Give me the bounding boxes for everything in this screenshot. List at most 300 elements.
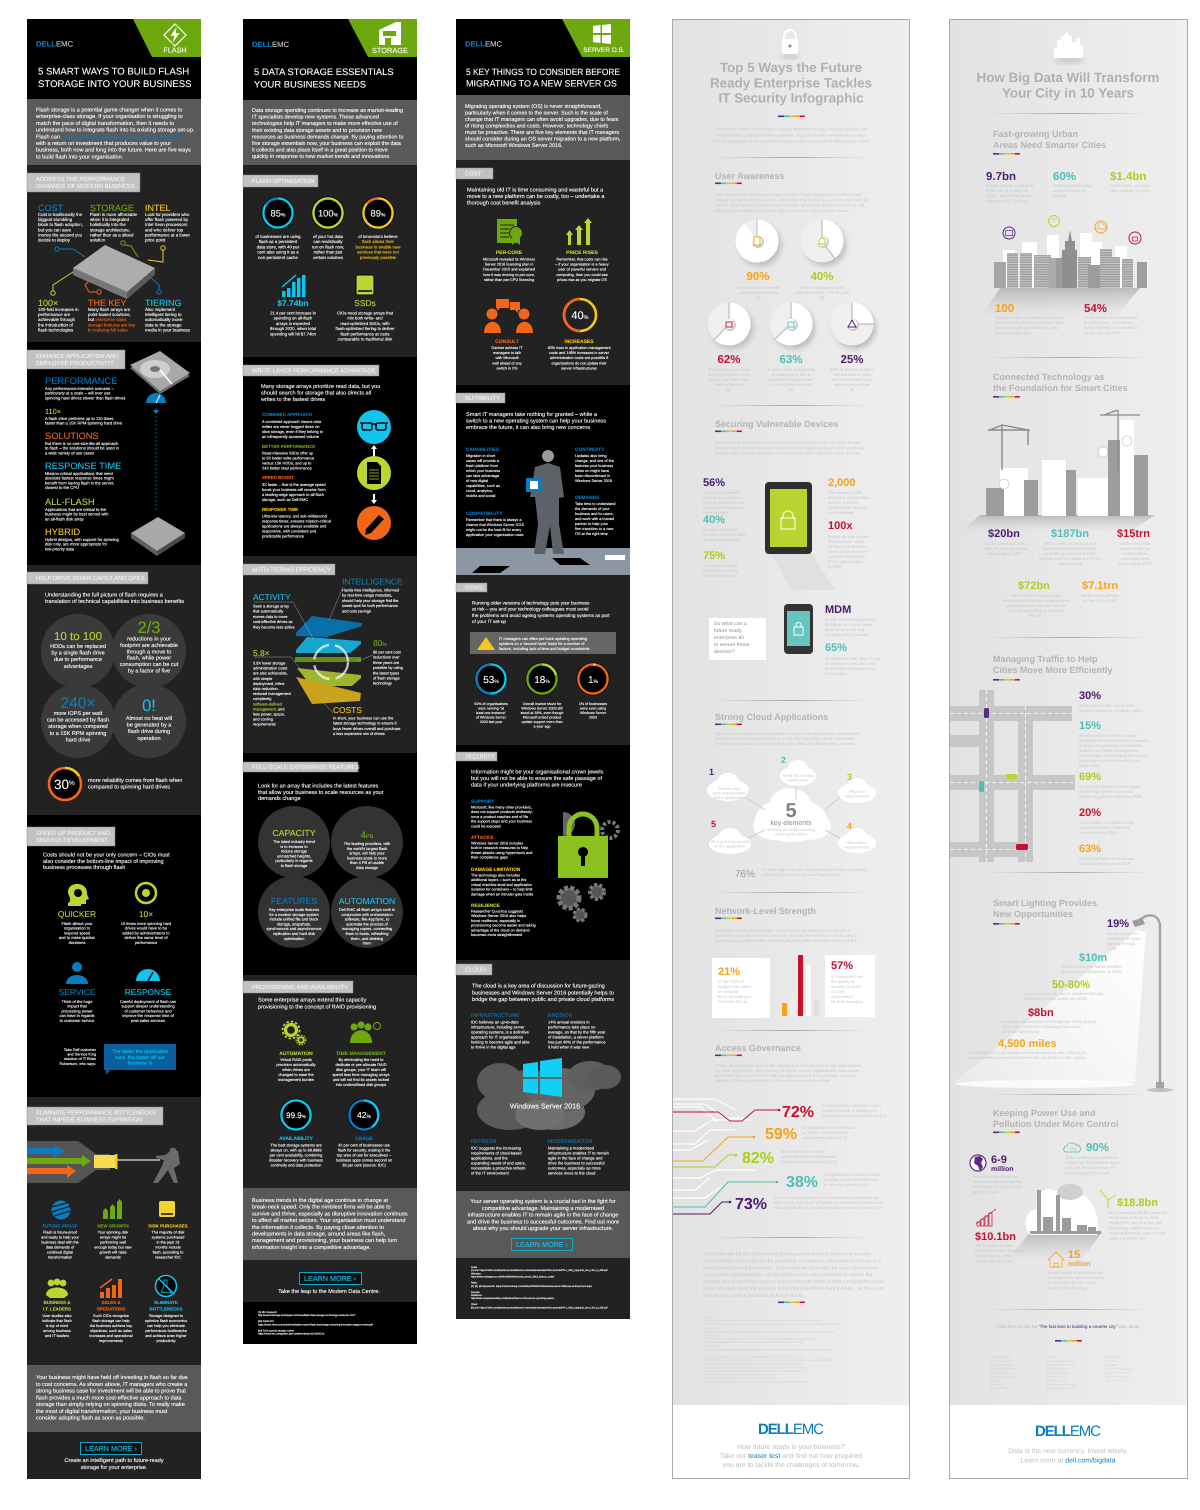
panel: eliminate bottlenecks [27,1107,188,1471]
references: [7] Gartner [704,1345,716,1348]
conclusion text: break-neck speed. Only the nimblest firms will be able to [252,1204,391,1211]
10x: added by administrators to [122,930,170,935]
sales and operations: Such CIOs recognise [93,1314,129,1318]
all-flash: business might be best served with [45,512,109,517]
service [59,962,96,1023]
stat: 15trn: will be the global [1120,541,1150,546]
circle: 10 to 100: due to performance [54,656,102,663]
cost: money the second you [38,232,83,237]
80 percent: possible by using [373,665,403,670]
circle: features [258,876,330,948]
references: [3] http://www.highwaysec.co.uk/story/2015/05/05/surveyreveals-40-percent-of-uk-people-do-not-understand-home-wifi-isp- [704,1323,840,1326]
stat: 20 percent: accounted for by connected [1079,825,1130,830]
stat: 30 percent [1079,690,1143,713]
stat: 15trn: value created by [1120,546,1151,551]
activity: cost-effective drives as [253,619,293,624]
tiering: Also implement [145,307,176,312]
stat: 56 percent: been secured [703,510,729,515]
support: Microsoft, like many other providers, [471,806,532,810]
intro: translation of technical capabilities into business benefits [45,598,184,605]
intel: performance at a lower [145,232,190,237]
panel: flash optimisation [243,175,401,342]
solutions [45,431,120,455]
future-proof: data demands of [46,1246,75,1250]
capabilities: of new digital [466,479,488,483]
illustration: street lamp with light cone [955,915,1173,1092]
references: [1] Avetco [704,1316,716,1319]
references: [6] Navigant Research [990,1376,1015,1378]
stat: 72bn: professional services by the end [1007,603,1066,608]
section heading: HELP DRIVE DOWN CAPEX AND OPEX [36,575,145,582]
10x: 10× [139,909,153,919]
the key: storage features are key [88,322,136,327]
combined approach: slow storage, even if they belong to [262,429,323,434]
capabilities: fresh platform from [466,464,498,468]
stat: 1.4bn: will be spent on smart [1110,183,1150,188]
stat: 10.1bn: $10.1bn [975,1231,1016,1243]
disk purchases: The majority of disk [152,1230,185,1234]
intro text: Here we take a look at five ways that a future ready business deals with security threats. [711,138,871,144]
circle: 4pb: the world's largest flash [347,846,387,851]
80 percent: 80 per cent cost [373,650,402,654]
stat: 20bn: cities per year on sensor [983,546,1028,551]
circle: zero: 0! [142,697,156,715]
panel: auto-tiering [243,564,403,736]
section heading: PROVISIONING AND AVAILABILITY [252,984,348,991]
attacks: built-in research measures to help [471,846,528,850]
intro text: such as Microsoft Windows Server 2016. [465,143,563,149]
stat: 18.8bn: through the use of smart grid [1109,1220,1162,1225]
section heading [243,762,360,772]
stat: 63 percent: a new connected car in 2025 [1079,861,1132,866]
learn more button: LEARN MORE › [85,1444,138,1453]
stat: 100: test potential solutions and more than [995,320,1064,325]
stat: 10.1bn: technology by global [975,1253,1012,1258]
5.8x: software-defined [253,701,282,706]
future-proof: FUTURE-PROOF [43,1224,78,1228]
storage: holistically into the [90,222,126,227]
compatibility: application your organisation uses [466,533,524,537]
title: 5 KEY THINGS TO CONSIDER BEFORE [466,67,620,77]
section heading: SPEED UP PRODUCT AND [36,830,110,837]
tiering: intelligent tiering to [145,312,182,317]
pie: 90 percent: cybersecurity training [739,290,778,295]
references: [7] IDC [990,1379,998,1382]
references: rivacy-167370/ [704,1334,721,1337]
stat: 72bn: will be spent annually on big [1010,593,1062,598]
capabilities: can take advantage [466,474,499,478]
panel: provisioning and availability [243,981,408,1336]
usage: flash for security, making it the [338,1148,390,1152]
ring: 30 percent: 30 [54,777,69,792]
references: [5] United Nations [990,1372,1011,1375]
circle: zero: operation [137,735,161,742]
cloud labels: Need for security [783,773,814,778]
body text: those who have a right to see and use data can get it. A future ready business [715,1073,856,1078]
price rises: – if your organisation is a heavy [555,263,609,267]
references: n [704,1352,706,1355]
case study link: Click here for the full 'The fast lane to building a smarter city' case study [997,1324,1140,1329]
stat: 100: develop smart cities [995,330,1031,335]
callout quote: The faster the application [112,1049,168,1055]
card: 21 percent: on network [718,989,739,994]
callout quote: business is [128,1061,153,1067]
response: Careful deployment of flash can [120,999,176,1004]
heading: Smart Lighting Provides [993,898,1097,908]
conclusion text: flash provides a much more cost-effective approach to data [36,1394,182,1401]
stat: 73 percent: have a very significant or significant impact on business and [774,1200,883,1205]
new growth: NEW GROWTH [97,1224,129,1228]
increases: 40% rises in application management [547,346,611,350]
intro text: The dynamic nature of information security demands not only constant vigilance, but [715,126,868,132]
stat: 90 percent: pollutant emissions than the [1065,1165,1116,1170]
ring: 89 percent [362,196,394,230]
resilience: becomes more straightforward [471,933,522,937]
stat: 10m: smart streetlights will be installed [1062,964,1123,969]
section heading [456,393,505,403]
conclusion text: Business trends in the digital age continue to change at [252,1197,388,1204]
better performance: to 5X better write performance [262,456,314,460]
support: the support stops and your business [471,820,532,824]
circle: 240x: storage when compared [48,723,108,730]
alert bar [470,632,616,654]
refresh: REFRESH [471,1139,496,1145]
stat: 75 percent [703,550,738,578]
ring: 18 percent: 18% [534,675,550,686]
footer: Dell EMC: DELLEMC [758,1421,824,1438]
increases: administration costs are possible if [550,356,609,360]
conclusion text: management and provisioning, your business can help turn [252,1237,397,1244]
references: [11] European Commission [1046,1360,1077,1363]
performance: particularly at a scale – will ever use [45,391,111,396]
intel [145,203,190,242]
disk purchases: DISK PURCHASES [148,1224,188,1228]
circle: capacity: is to increase to [280,844,308,849]
references: [4] European Commission [990,1368,1019,1371]
continuity: Windows Server 2016 [575,479,612,483]
circle: 10 to 100: HDDs can be replaced [50,643,106,650]
stat: 10m: by cities and companies by 2025 [1062,969,1122,974]
the key: Many flash arrays are [88,307,131,312]
ring: 30 percent [48,767,82,801]
ring: 1 percent: 1% [588,675,599,686]
stat: 38 percent: to public cloud resources due [824,1177,878,1182]
learn more button [80,1442,142,1454]
cloud labels: of the application [714,795,745,800]
continuity: CONTINUITY [575,447,605,453]
110x [45,407,123,426]
learn more button [300,1272,362,1284]
erosion: performance take place on [548,1024,595,1030]
title: MIGRATING TO A NEW SERVER OS [466,78,617,88]
icon: cloud [1095,221,1107,233]
stat: 54 percent [1084,303,1139,335]
server OS corner badge: SERVER O.S. [583,47,625,54]
circle: 4pb: The leading providers, with [344,841,390,846]
refresh: necessitate a proactive refresh [471,1166,525,1170]
intro: but you will not be able to ensure the safe passage of [471,775,603,782]
references: [60] 10Gb IDC [258,1320,274,1323]
stat: 69 percent: 69% [1079,771,1101,783]
reliability text: compared to spinning hard drives [88,784,170,791]
stat: 72bn: $72bn [1018,580,1050,592]
stat: 60 percent: of the world's leading [1053,183,1092,188]
time management [332,1021,390,1087]
logo: Dell EMC: DELLEMC [252,40,289,49]
stat: 65 percent [825,642,882,676]
erosion: EROSION [548,1013,573,1019]
disk purchases: flash, according to [153,1250,183,1254]
refresh: IDC suggests the increasing [471,1146,521,1150]
disk purchases: researcher IDC [155,1256,181,1260]
damage limitation: virtual machine level and application [471,883,532,887]
stat: 65 percent: of companies and are using [825,661,876,666]
stat: ssds: read-optimized SSDs, with [340,321,390,326]
speed boost: 3X faster – that is the average speed [262,482,326,487]
performance: Any performance-intensive scenario – [45,386,114,391]
circle: 4pb: than 4 PB of usable [350,860,384,865]
demands: DEMANDS [575,495,600,501]
stat: 65 percent: in the future [825,671,847,676]
automation: when drives are [282,1067,310,1072]
circle: 240x: can be accessed by flash [47,717,109,724]
compatibility [466,511,524,537]
section heading: ELIMINATE PERFORMANCE BOTTLENECKS [36,1110,156,1116]
refresh [471,1139,526,1176]
circle: 10 to 100 [41,614,115,688]
stat: 38 percent: of organisations restrict access [824,1172,880,1177]
stat: 73 percent: of users say that adoption of cloud-based applications will [774,1195,879,1200]
stat: mdm: Mobile device management [825,617,876,622]
icon: co2 cloud [1064,1143,1080,1152]
pie: 90 percent: 90% [746,271,770,283]
circle: 2/3: reductions in your [127,636,171,642]
section heading [27,173,140,192]
sales and operations: SALES & [101,1300,121,1305]
response: post-sales services [131,1018,165,1023]
intro: the problems and avoid ageing systems operating systems as part [472,613,610,618]
automation: management burden [278,1077,314,1082]
panel: power and pollution [970,1108,1167,1290]
continuity: change, and one of the [575,459,614,463]
closing text: The challenge for the future-ready business that wants to overcome security [703,1252,872,1258]
stat: 50-80 percent: cuts in energy bills can be achieved through [1024,991,1104,996]
conclusion text: the information it collects. By paying close attention to [252,1224,384,1231]
support: does not support products endlessly; [471,810,533,814]
activity: Seek a storage array [253,604,289,608]
stat: mdm: tools for ensuring that [825,627,865,632]
reliability text: more reliability comes from flash when [88,777,182,784]
stat: 7.74bn: 21.4 per cent increase in [270,310,317,316]
references: https://www.idc.com/getdoc.jsp?containerId=prUS41534316 [258,1333,325,1336]
5.8x: data reduction, [253,686,279,691]
stat texts: non-persistent cache [258,255,299,260]
customer note: reaction of IT Brian [64,1057,96,1061]
stat: 19 percent: 2026 [1107,946,1117,951]
new growth: performing well [100,1240,126,1244]
response time: closest to the CPU [45,485,79,490]
intro text: business, both now and long into the future. Here are five ways [36,147,191,154]
customer note: Robertson, who says: [59,1062,96,1066]
conclusion text: information insight into a competitive advantage. [252,1244,371,1251]
usage: USAGE [355,1136,374,1142]
stat: mdm: MDM [825,604,851,616]
intro: Understanding the full picture of flash requires a [45,592,164,598]
heading: Securing Vulnerable Devices [715,419,838,429]
ring: 85 percent [262,196,294,230]
stat: ssds: flash-optimized tiering to deliver [336,326,395,331]
card: 21 percent: of the CIO's IT [718,979,745,984]
stat: 72 percent: 72% [782,1104,814,1121]
floor band [456,548,630,575]
references: [19] Technavio [1105,1356,1122,1359]
panel: managing traffic [950,654,1150,866]
stat: 69 percent [1079,771,1143,799]
icon: wifi [1048,216,1060,226]
section heading [456,168,493,179]
icon: wind turbine [1100,1190,1116,1208]
pie: 62 percent: concerned about online [708,372,751,377]
circle: automation: managing copies, connecting [342,926,392,931]
response time: Ultra-low latency, and sub-millisecond [262,514,327,518]
cost: COST [38,203,64,213]
disk purchases: months include [155,1246,181,1250]
all-flash: an all-flash disk array [45,516,85,521]
stat: 20 percent [1079,807,1135,835]
modernisation: infrastructure enables IT to remain [548,1150,609,1156]
tiering: media in your business [145,327,191,332]
eliminate bottlenecks: and achieve even higher [145,1334,187,1338]
business and it leaders: and IT leaders [45,1334,69,1338]
learn more button: LEARN MORE › [304,1274,357,1283]
stat: ssds: SSDs [354,298,376,308]
circle: capacity: The latest industry trend [273,839,315,844]
stat: 59 percent: 59% [765,1126,797,1143]
stat: 82 percent [742,1149,837,1167]
circle: 4pb: data storage [356,865,378,870]
references: http://searchstorage.techtarget.com/news/flash-data-storage-technology-trends-for-2017 [258,1314,356,1317]
references: [14] http://futurereadyworkforce.dell.com/dell-data-security-survey/ [704,1374,778,1377]
circle: features: include unified file and block [270,917,318,922]
conclusion text: the most of digital transformation, your business must [36,1408,168,1415]
conclusion text: and drive the business to successful outcomes. Find out more [467,1218,619,1225]
ring: 30 percent: % [69,780,75,787]
eliminate bottlenecks: BOTTLENECKS [150,1306,183,1311]
card: 21 percent: 21% [718,966,740,978]
body text: will not underestimate the “human factor” involved in many security issues. [715,208,850,213]
references: [1] 451 Research [258,1311,278,1314]
references: [25] UTM Research [1105,1379,1127,1382]
better performance [262,444,315,470]
section heading: THAT IMPEDE BUSINESS EXPANSION [36,1116,142,1124]
stat texts [255,234,401,260]
intro: The cloud is a key area of discussion for future-gazing [472,982,605,990]
ring: 85 percent: 85% [271,208,286,218]
learn more button: LEARN MORE › [516,1240,569,1249]
stat: 76 percent: 76% [735,869,755,880]
intro text: particularly when it comes to the server. Such is the scale of [465,110,608,116]
stat: 6-9 million [973,1154,1024,1194]
stat: 2,000: will see 3,000 to [828,500,858,505]
stat: 15 million: in 2021 through the use of [1048,1280,1096,1285]
stat: 7.1trn: on the IoT by 2020 [1083,598,1118,603]
stat: 187bn [1039,528,1102,566]
pie: 63 percent: in their professional life [770,382,813,387]
pie: 40 percent: [3] [820,295,824,300]
section heading: AUTO-TIERING EFFICIENCY [252,566,331,574]
ring: 18 percent: Windows Server 2003 still [521,706,563,710]
per-core: Server 2016 licensing plan in [485,263,533,267]
damage limitation: The technology also includes [471,874,520,878]
cloud labels: 5 [785,800,797,822]
stat: 9.7bn: people will live on Earth by [986,183,1035,188]
increases: server infrastructures [561,366,597,370]
infrastructure: looking to become agile and able [471,1040,530,1044]
service: can have in regards [59,1013,95,1018]
heading: New Opportunities [993,909,1073,919]
cost: block to flash adoption, [38,222,83,227]
resilience: RESILIENCE [471,903,501,909]
intro: Some enterprise arrays extend thin capacity [258,996,366,1004]
stat: 15 million: homes' worth of emissions will [1048,1270,1103,1275]
combined approach: an infrequently-accessed volume [262,434,319,439]
title: STORAGE INTO YOUR BUSINESS [38,79,192,90]
capabilities: CAPABILITIES [466,447,500,453]
stat: 18.8bn: in cost savings will be produced [1109,1210,1167,1215]
eliminate bottlenecks: optimize flash economics [145,1319,187,1323]
quicker [58,884,96,945]
100x: flash technologies [38,327,74,332]
sales and operations: OPERATIONS [97,1306,125,1311]
stat: 56 percent: devices are used for [703,495,741,500]
future-proof: continual digital [47,1250,73,1254]
stat: 60 percent: Europe [1053,193,1067,198]
demands: Take time to understand [575,502,616,506]
cost: but you can save [38,227,72,232]
panel: security [456,752,618,937]
quicker: Flash allows your [62,921,93,926]
stat: 7.74bn: $7.74bn [277,298,309,308]
circle: automation: them, and deleting [351,936,383,941]
circle: 4pb: business scale to more [347,855,387,860]
body text: is crucial to keeping data from being at risk. Implementing end-to-end security [715,736,857,741]
conclusion text: about why you should upgrade your server infrastructure. [473,1225,614,1232]
stat: 15trn: smart city by 2025 [1118,561,1152,566]
stat: 20bn: $20bn [988,528,1020,540]
intro: that allow your business to scale resources as your [258,789,384,796]
panel: big data city infographic [950,20,1188,1478]
time management: and will not find its assets locked [333,1077,389,1082]
ring: 1 percent [576,662,610,720]
stat: 7.1trn: will be spent globally [1081,593,1120,598]
cost: decide to deploy [38,238,71,242]
availability: The best storage systems are [270,1142,322,1148]
pie: 25 percent: 25% of decision makers [830,367,874,372]
stat: 54 percent: that is expected to increase to [1084,325,1139,330]
card: 57 percent: for their company [831,999,864,1004]
compatibility: might not be the best fit for every [466,528,521,532]
heading: Areas Need Smarter Cities [993,140,1106,150]
intelligence: INTELLIGENCE [342,576,403,586]
stat: 1.4bn: cities globally by 2020 [1110,188,1151,193]
cloud labels: 1 [709,767,714,777]
section heading [27,350,125,369]
stat: 40 percent: 40% [703,514,725,526]
stat texts: run on flash now, [312,244,344,249]
circle: 10 to 100: 10 to 100 [54,631,102,643]
circle: 4pb: 4PB [361,830,374,841]
capabilities: capabilities, such as [466,484,500,488]
